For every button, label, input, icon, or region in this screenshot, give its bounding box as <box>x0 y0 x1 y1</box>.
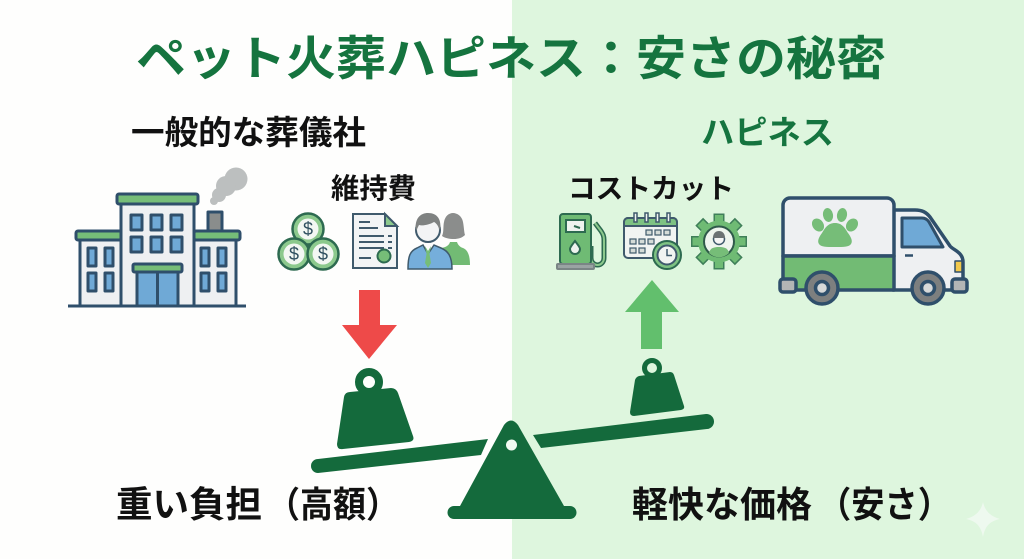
icon: fuel pump <box>557 214 604 269</box>
icon: paw print <box>809 207 861 247</box>
arrow: red down <box>342 290 397 359</box>
fulcrum <box>448 420 577 519</box>
label: light price: 軽快な価格 <box>632 476 812 528</box>
heading: Happiness: ハピネス <box>701 114 834 151</box>
seesaw <box>311 360 714 519</box>
label: maintenance cost: 維持費 <box>331 173 416 204</box>
icon: pet cremation truck <box>780 198 967 304</box>
label: heavy burden: （高額） <box>267 476 399 528</box>
beam: right arm <box>533 414 714 448</box>
label: light price <box>632 476 951 528</box>
weight: light right <box>630 360 684 416</box>
label: heavy burden: 重い負担 <box>116 475 262 528</box>
label: cost cut: コストカット <box>568 173 734 204</box>
weight: heavy left <box>337 372 414 449</box>
beam: left arm <box>311 439 488 473</box>
heading: general funeral company: 一般的な葬儀社 <box>131 114 366 151</box>
arrow: green up <box>625 280 679 349</box>
label: heavy burden <box>116 475 399 528</box>
icon: invoice document <box>353 214 397 268</box>
icon: people <box>408 213 470 269</box>
icon: coins: $ <box>303 219 313 239</box>
icon: coins <box>278 214 338 270</box>
icon: coins: $ <box>289 244 299 264</box>
icon: gear with person <box>691 214 747 270</box>
icon: calendar with clock <box>624 213 681 269</box>
icon: sparkle <box>966 502 1000 537</box>
icon: funeral building <box>68 168 248 306</box>
title: ペット火葬ハピネス：安さの秘密 <box>136 20 886 89</box>
panel: right green background <box>512 0 1024 559</box>
icon: coins: $ <box>318 244 328 264</box>
label: light price: （安さ） <box>818 476 951 528</box>
